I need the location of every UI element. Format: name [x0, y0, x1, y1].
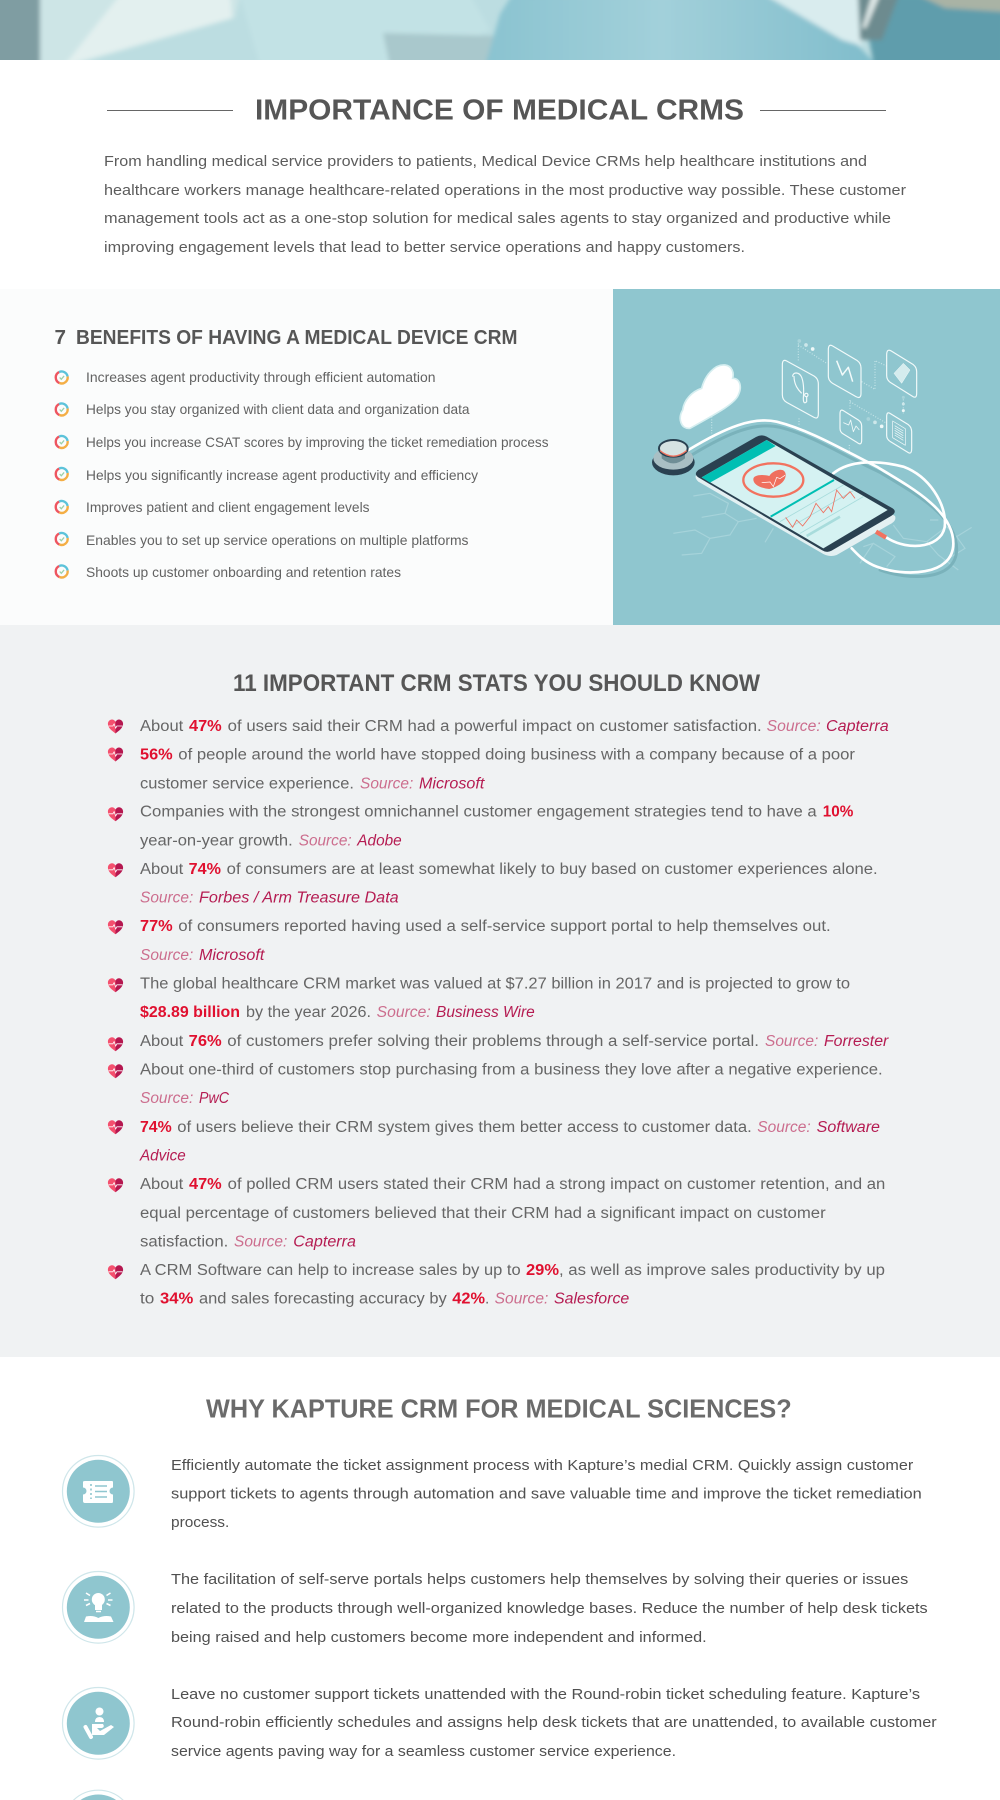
- title with rules: IMPORTANCE OF MEDICAL CRMS: [255, 94, 744, 126]
- icon: partial fourth circle: [63, 1790, 134, 1800]
- stat 5: of consumers reported having used a self-service support portal to help themselves out.: [178, 918, 831, 935]
- molecule background: [673, 493, 972, 570]
- benefits list: Enables you to set up service operations on multiple platforms: [86, 532, 468, 548]
- why Kapture heading: WHY KAPTURE CRM FOR MEDICAL SCIENCES?: [206, 1396, 792, 1424]
- stat 1: Capterra: [826, 718, 889, 735]
- stat 9: [108, 1119, 880, 1164]
- stat 10: Capterra: [293, 1234, 356, 1250]
- stat 7: Forrester: [824, 1033, 889, 1050]
- stat 2: [108, 746, 855, 792]
- benefits heading: BENEFITS OF HAVING A MEDICAL DEVICE CRM: [76, 327, 518, 349]
- stat 4: 74%: [189, 861, 221, 878]
- stat 11: 34%: [160, 1290, 194, 1308]
- stat 5: Microsoft: [199, 947, 265, 964]
- stat 10: satisfaction.: [140, 1234, 228, 1250]
- text: self-serve portals: [171, 1571, 928, 1646]
- stat 2: Microsoft: [419, 776, 485, 792]
- intro paragraph: improving engagement levels that lead to better service operations and happy customers.: [104, 239, 745, 256]
- stat 11: 42%: [452, 1290, 485, 1308]
- stat 10: equal percentage of customers believed that their CRM had a significant impact on customer: [140, 1205, 826, 1222]
- panel: benefits: [0, 289, 613, 625]
- benefits list: Helps you stay organized with client data and organization data: [86, 401, 470, 417]
- intro paragraph: healthcare workers manage healthcare-related operations in the most productive way possible. These customer: [104, 182, 906, 199]
- stat 11: A CRM Software can help to increase sales by up to: [140, 1262, 521, 1279]
- icon: agent in hand: [63, 1688, 134, 1759]
- stat 9: of users believe their CRM system gives them better access to customer data.: [177, 1119, 752, 1136]
- stat 1: 47%: [189, 718, 222, 735]
- stat 9: Software: [817, 1119, 880, 1136]
- stat 2: Source:: [360, 776, 413, 792]
- benefits heading: 7: [54, 327, 66, 349]
- panel: CRM stats: [0, 625, 1000, 1357]
- intro paragraph: management tools act as a one-stop solution for medical sales agents to stay organized and productive while: [104, 210, 891, 227]
- stethoscope tube: [688, 420, 957, 577]
- text: round-robin: Round-robin efficiently schedules and assigns help desk tickets that are unattended, to available customer: [171, 1714, 937, 1731]
- stat 7: Source:: [765, 1033, 818, 1050]
- stat 4: Source:: [140, 890, 193, 906]
- floating icon panels: [782, 345, 917, 453]
- stat 10: of polled CRM users stated their CRM had a strong impact on customer retention, and an: [228, 1176, 885, 1193]
- text: round-robin: Leave no customer support tickets unattended with the Round-robin ticket scheduling feature. Kapture’s: [171, 1686, 920, 1703]
- stat 11: Source:: [495, 1290, 548, 1308]
- stat 5: [108, 918, 831, 964]
- stat 4: of consumers are at least somewhat likely to buy based on customer experiences alone.: [227, 861, 878, 878]
- stat 2: customer service experience.: [140, 776, 354, 792]
- benefits list: Helps you significantly increase agent productivity and efficiency: [86, 467, 478, 483]
- stat 9: Source:: [757, 1119, 811, 1136]
- stat 8: PwC: [199, 1090, 230, 1107]
- chest piece: [652, 440, 695, 475]
- stat 6: $28.89 billion: [140, 1004, 240, 1021]
- text: round-robin: [171, 1686, 937, 1760]
- hero photo strip: [0, 0, 1000, 60]
- stat 4: Forbes / Arm Treasure Data: [199, 890, 399, 906]
- text: ticket assignment: process.: [171, 1514, 229, 1531]
- text: ticket assignment: [171, 1457, 922, 1531]
- text: ticket assignment: support tickets to agents through automation and save valuable time and improve the ticket remediation: [171, 1486, 922, 1503]
- stat 11: [108, 1262, 885, 1308]
- stats heading: 11 IMPORTANT CRM STATS YOU SHOULD KNOW: [233, 670, 760, 697]
- stat 1: of users said their CRM had a powerful impact on customer satisfaction.: [228, 718, 762, 735]
- stat 5: Source:: [140, 947, 193, 964]
- text: round-robin: service agents paving way for a seamless customer service experience.: [171, 1743, 676, 1760]
- stat 10: Source:: [234, 1234, 287, 1250]
- benefits list: Increases agent productivity through efficient automation: [86, 369, 436, 385]
- stat 5: 77%: [140, 918, 173, 935]
- benefits list: [56, 369, 548, 580]
- stat 6: The global healthcare CRM market was valued at $7.27 billion in 2017 and is projected to grow to: [140, 976, 850, 992]
- stat 3: 10%: [823, 804, 854, 820]
- stat 10: About: [140, 1176, 184, 1193]
- stat 11: Salesforce: [554, 1290, 630, 1308]
- stat 11: 29%: [526, 1262, 559, 1279]
- smartphone: [696, 435, 895, 556]
- stat 11: to: [140, 1290, 154, 1308]
- stat 7: About: [140, 1033, 184, 1050]
- stat 9: Advice: [139, 1148, 186, 1164]
- text: ticket assignment: Efficiently automate the ticket assignment process with Kapture’s medial CRM. Quickly assign customer: [171, 1457, 913, 1474]
- stat 10: 47%: [189, 1176, 222, 1193]
- stat 8: About one-third of customers stop purchasing from a business they love after a negative experience.: [140, 1062, 883, 1078]
- icon: ticket: [63, 1456, 134, 1527]
- cloud: [680, 365, 740, 428]
- stat 8: Source:: [140, 1090, 193, 1107]
- stat 9: 74%: [140, 1119, 172, 1136]
- stat 3: year-on-year growth.: [140, 832, 293, 850]
- dotted connectors: [712, 343, 903, 453]
- stat 11: , as well as improve sales productivity by up: [559, 1262, 885, 1279]
- panel: medical app illustration: [613, 289, 1000, 625]
- stat 6: [108, 976, 850, 1021]
- stat 6: Business Wire: [436, 1004, 535, 1021]
- stat 7: of customers prefer solving their problems through a self-service portal.: [227, 1033, 759, 1050]
- stat 1: [108, 718, 889, 735]
- stat 2: of people around the world have stopped doing business with a company because of a poor: [178, 746, 855, 764]
- icon: knowledge bulb: [63, 1572, 134, 1643]
- stat 3: Companies with the strongest omnichannel customer engagement strategies tend to have a: [140, 804, 817, 820]
- benefits list: Improves patient and client engagement levels: [86, 499, 370, 515]
- stat 3: [108, 804, 854, 850]
- stat 7: [108, 1033, 889, 1051]
- stat 8: [108, 1062, 883, 1107]
- stat 11: and sales forecasting accuracy by: [199, 1290, 447, 1308]
- stat 4: About: [140, 861, 184, 878]
- intro paragraph: [104, 153, 906, 256]
- stat 10: [108, 1176, 885, 1250]
- intro paragraph: From handling medical service providers to patients, Medical Device CRMs help healthcare institutions and: [104, 153, 867, 170]
- stat 1: Source:: [767, 718, 821, 735]
- stat 3: Adobe: [356, 832, 402, 850]
- benefits list: Shoots up customer onboarding and retention rates: [86, 564, 401, 580]
- stat 1: About: [140, 718, 184, 735]
- panel: why Kapture: [0, 1357, 1000, 1800]
- stat 3: Source:: [299, 832, 352, 850]
- stat 7: 76%: [189, 1033, 222, 1050]
- stat 2: 56%: [140, 746, 173, 764]
- text: self-serve portals: The facilitation of self-serve portals helps customers help themselves by solving their queries or issues: [171, 1571, 908, 1588]
- stat 11: .: [485, 1290, 489, 1308]
- stat 4: [108, 861, 878, 906]
- stat 6: Source:: [377, 1004, 431, 1021]
- benefits list: Helps you increase CSAT scores by improving the ticket remediation process: [86, 434, 548, 450]
- text: self-serve portals: being raised and help customers become more independent and informed.: [171, 1629, 707, 1646]
- stat 6: by the year 2026.: [246, 1004, 371, 1021]
- text: self-serve portals: related to the products through well-organized knowledge bases. Reduce the number of help desk tickets: [171, 1600, 928, 1617]
